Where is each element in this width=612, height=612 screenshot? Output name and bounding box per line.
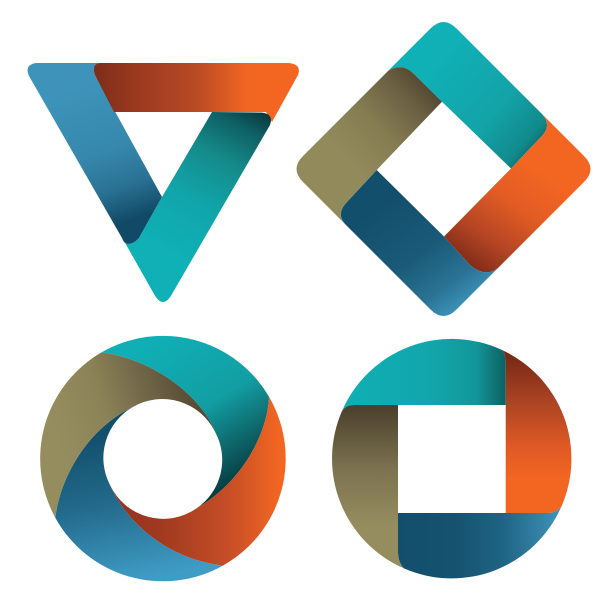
ring: orange band (110, 397, 286, 566)
circle: orange band (502, 350, 571, 513)
ring: olive band (40, 352, 215, 518)
triangle: orange band (94, 63, 299, 122)
triangle: teal band (124, 112, 271, 302)
circle: olive band (332, 405, 404, 568)
circle with square opening (332, 339, 571, 578)
diamond ribbon (296, 22, 590, 316)
triangle ribbon (28, 63, 299, 302)
diamond: dark blue band (341, 170, 498, 316)
circle: teal band (342, 339, 506, 411)
swirl ring (40, 336, 286, 581)
diamond: olive band (296, 67, 442, 224)
ring: teal band (102, 336, 269, 508)
triangle: blue band (28, 63, 162, 244)
diamond: orange band (444, 114, 590, 272)
ring: blue band (55, 407, 223, 581)
circle: blue band (398, 507, 561, 578)
diamond: teal band (388, 22, 547, 168)
